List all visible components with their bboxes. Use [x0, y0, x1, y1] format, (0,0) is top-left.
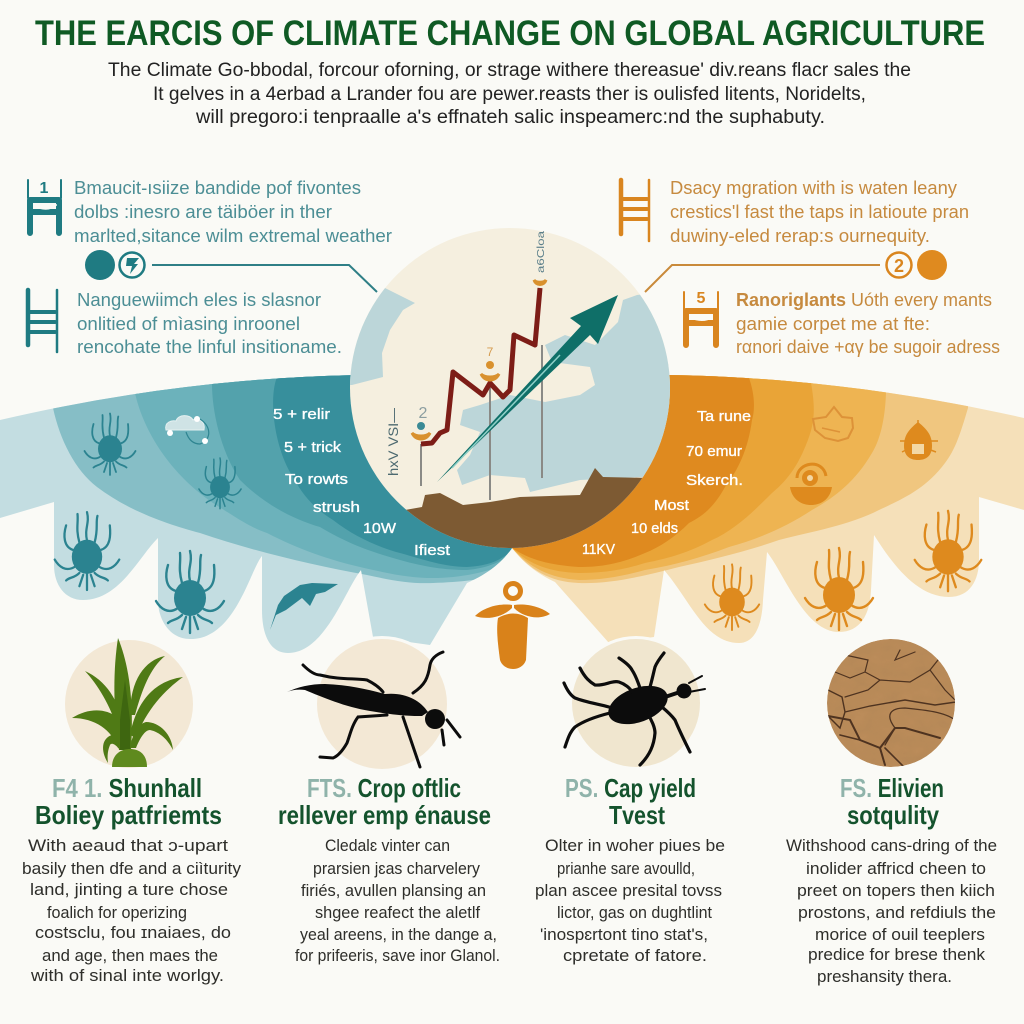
- text block: onlitied of mìasing inroonel: [77, 314, 300, 334]
- band labels: orange: Ta rune: [697, 408, 751, 425]
- icon: tick teal 2: [199, 458, 241, 509]
- panel: orange fan band: [512, 375, 1024, 643]
- icon: numbered frame 5: [684, 290, 718, 345]
- heading: F4 1. Shunhall: [52, 773, 202, 803]
- icon: plant: [65, 638, 193, 768]
- icon: numbered frame 1: [28, 180, 61, 233]
- text block: [74, 178, 392, 246]
- text block: [77, 290, 342, 357]
- text block: predice for brese thenk: [808, 945, 985, 964]
- connector: right badge and line: [645, 250, 947, 292]
- panel: soil column: [786, 639, 997, 986]
- panel: pest column: [278, 636, 500, 965]
- text block: basily then dfe and a ciìturity: [22, 859, 241, 878]
- icon: frame: [621, 180, 649, 241]
- callout: left top: [28, 178, 392, 246]
- text block: [535, 836, 725, 965]
- band labels: orange: [582, 408, 751, 558]
- text block: [295, 836, 500, 965]
- text block: gamie corpet me at fte:: [736, 314, 930, 334]
- text block: With aeaud that ɔ-upart: [28, 836, 228, 855]
- icon: numbered frame 5: 5: [697, 290, 706, 307]
- band labels: teal: 10W: [363, 520, 397, 537]
- chart markers: [412, 280, 546, 439]
- heading: Boliey patfriemts: [35, 800, 222, 830]
- icon: numbered frame 1: 1: [40, 180, 49, 197]
- rising arrow: [437, 295, 618, 482]
- icon: tick orange 3: [705, 564, 759, 630]
- panel: yield column: [535, 636, 725, 965]
- chart labels: 2: [419, 405, 428, 422]
- callout: left lower: [28, 290, 342, 357]
- heading: FTS. Crop oftlic: [307, 773, 461, 803]
- heading: [840, 773, 944, 830]
- heading: [35, 773, 222, 830]
- text block: dolbs :inesro are täiböer in ther: [74, 202, 332, 222]
- text block: firiés, avullen plansing an: [301, 881, 486, 900]
- icon: tick teal 4: [156, 551, 224, 633]
- text block: yeal areens, in the dange a,: [300, 925, 497, 944]
- heading: Tvest: [609, 800, 665, 830]
- text block: crestics'l fast the taps in latioute pran: [670, 202, 969, 222]
- text block: with of sinal inte worlgy.: [30, 966, 224, 985]
- text block: Olter in woher piues be: [545, 836, 725, 855]
- text block: rencohate the linful insitioname.: [77, 337, 342, 357]
- text block: inolider affricd cheen to: [806, 859, 986, 878]
- text block: Dsacy mgration with is waten leany: [670, 178, 957, 198]
- heading: [565, 773, 696, 830]
- text block: shgee reafect the aletlf: [315, 903, 480, 922]
- text block: lictor, gas on dughtlint: [557, 903, 712, 922]
- heading: [278, 773, 491, 830]
- band labels: teal: Ifiest: [414, 542, 451, 559]
- connector: right badge and line: 2: [894, 256, 904, 276]
- globe base: [350, 228, 670, 548]
- text block: [786, 836, 997, 986]
- text block: Withshood cans-dring of the: [786, 836, 997, 855]
- band labels: orange: Most: [654, 497, 690, 514]
- text block: rαnori daive +αγ be sugoir adress: [736, 337, 1000, 357]
- band labels: teal: strush: [313, 499, 360, 516]
- text block: Ranoriglants Uóth every mants: [736, 290, 992, 310]
- band labels: teal: 5 + trick: [284, 439, 342, 456]
- intro text: The Climate Go-bbodal, forcour oforning, or strage withere thereasue' div.reans flacr sales the: [108, 60, 911, 81]
- connector: left badge and line: [85, 250, 377, 292]
- panel: plant column: [22, 638, 241, 985]
- band labels: orange: 10 elds: [631, 520, 678, 537]
- icon: tick orange 2: [805, 548, 873, 630]
- intro text: will pregoro:i tenpraalle a's effnateh salic inspeamerc:nd the suphabuty.: [195, 107, 825, 128]
- text block: prianhe sare avoulld,: [557, 859, 695, 878]
- text block: foalich for operizing: [47, 903, 187, 922]
- band labels: teal: To rowts: [285, 471, 348, 488]
- icon: beetle: [564, 636, 705, 770]
- callout: right top: [621, 178, 969, 246]
- text block: duwiny-eled rerap:s ournequity.: [670, 226, 930, 246]
- chart labels: [385, 230, 547, 476]
- icon: central orange figure: [475, 584, 550, 669]
- text block: morice of ouil teeplers: [815, 925, 985, 944]
- band labels: teal: 5 + relir: [273, 406, 330, 423]
- text block: marlted,sitance wilm extremal weather: [74, 226, 392, 246]
- icon: locust silhouette: [270, 583, 338, 630]
- icon: cloud network: [166, 416, 209, 444]
- chart guide lines: [421, 345, 542, 500]
- text block: [736, 290, 1000, 357]
- heading: PS. Cap yield: [565, 773, 696, 803]
- icon: leaf outline: [813, 407, 853, 441]
- text block: Bmaucit-ısiize bandide pof fivontes: [74, 178, 361, 198]
- heading: sotqulity: [847, 800, 939, 830]
- chart labels: a6Cloa: [536, 230, 547, 273]
- chart labels: hxV VSI—: [385, 408, 401, 476]
- text block: preet on topers then kiich: [797, 881, 995, 900]
- icon: tick teal 3: [55, 512, 119, 590]
- panel: globe with rising chart: [340, 228, 680, 560]
- icon: tick orange 1: [915, 511, 981, 591]
- text block: costsclu, fou ɪnaiaes, do: [35, 923, 231, 942]
- text block: prostons, and refdiuls the: [798, 903, 996, 922]
- text block: cpretate of fatore.: [563, 946, 707, 965]
- band labels: teal: [273, 406, 451, 559]
- red trend line: [421, 288, 540, 444]
- intro text: It gelves in a 4erbad a Lrander fou are pewer.reasts ther is oulisfed litents, Noridelts,: [153, 84, 866, 105]
- text block: plan ascee presital tovss: [535, 881, 722, 900]
- heading: FS. Elivien: [840, 773, 944, 803]
- panel: teal fan band: [0, 375, 512, 653]
- intro text: [108, 60, 911, 128]
- icon: insect: [287, 636, 460, 772]
- chart labels: 7: [487, 345, 494, 359]
- text block: prarsien jɛas charvelery: [313, 859, 480, 878]
- callout: right lower: [684, 290, 1000, 357]
- band labels: orange: 11KV: [582, 541, 615, 558]
- text block: Nanguewiimch eles is slasnor: [77, 290, 321, 310]
- text block: Cledalɛ vinter can: [325, 836, 450, 855]
- icon: bowl: [790, 464, 832, 505]
- band labels: orange: 70 emur: [686, 443, 742, 460]
- map landmasses: [340, 280, 680, 492]
- text block: and age, then maes the: [42, 946, 218, 965]
- text block: 'inospɛrtont tino stat's,: [540, 925, 708, 944]
- heading: rellever emp énause: [278, 800, 491, 830]
- icon: cracked soil: [827, 639, 956, 768]
- icon: frame: [28, 290, 57, 352]
- band labels: orange: Skerch.: [686, 472, 743, 489]
- text block: [670, 178, 969, 246]
- soil: [406, 468, 642, 548]
- text block: for prifeeris, save inor Glanol.: [295, 946, 500, 965]
- text block: land, jinting a ture chose: [30, 880, 228, 899]
- text block: [22, 836, 241, 985]
- icon: tick teal 1: [84, 414, 136, 475]
- text block: preshansity thera.: [817, 967, 952, 986]
- icon: hut: [900, 420, 938, 460]
